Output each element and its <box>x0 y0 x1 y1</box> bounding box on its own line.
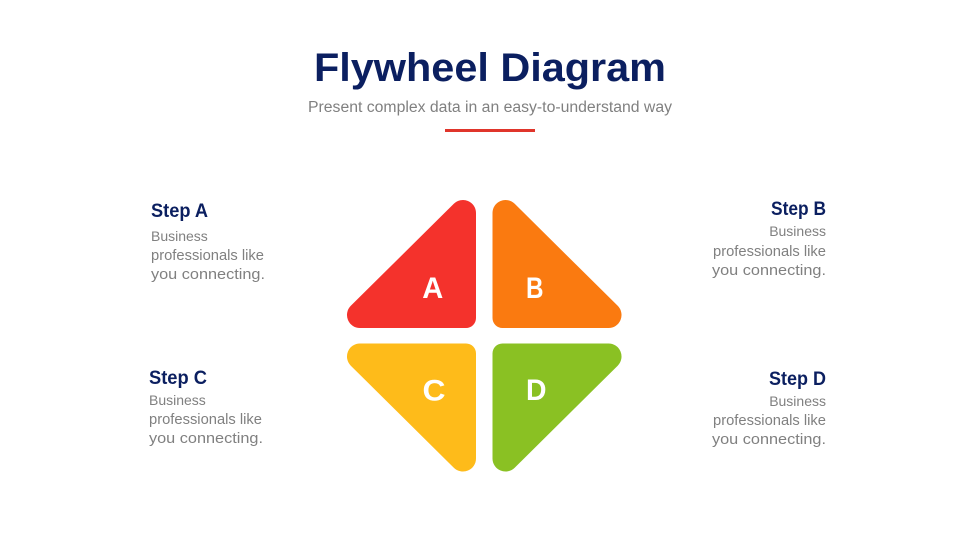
flywheel diagram <box>347 200 622 472</box>
title underline <box>445 129 535 132</box>
text block: Step D: you connecting. <box>712 431 826 448</box>
text block: Step A: you connecting. <box>151 266 265 283</box>
segment D <box>492 344 622 472</box>
subtitle: Present complex data in an easy-to-understand way <box>308 99 672 116</box>
title: Flywheel Diagram <box>314 46 666 90</box>
segment B: B <box>526 272 544 305</box>
text block: Step A: Step A <box>151 201 208 222</box>
text block: Step D: professionals like <box>713 412 826 429</box>
text block: Step B: professionals like <box>713 243 826 260</box>
text block: Step B <box>712 199 826 279</box>
text block: Step D: Business <box>769 393 826 409</box>
text block: Step C: you connecting. <box>149 430 263 447</box>
text block: Step A: professionals like <box>151 247 264 264</box>
text block: Step B: you connecting. <box>712 262 826 279</box>
text block: Step C: professionals like <box>149 411 262 428</box>
segment D: D <box>526 374 546 407</box>
text block: Step C: Step C <box>149 368 207 389</box>
segment A <box>347 200 476 328</box>
segment C <box>347 344 476 472</box>
text block: Step A: Business <box>151 228 208 244</box>
text block: Step D <box>712 369 826 448</box>
text block: Step B: Business <box>769 223 826 239</box>
text block: Step B: Step B <box>771 199 826 220</box>
segment C: C <box>422 374 446 408</box>
segment A: A <box>422 272 443 305</box>
segment B <box>492 200 622 328</box>
text block: Step D: Step D <box>769 369 826 390</box>
text block: Step C <box>149 368 263 447</box>
text block: Step A <box>151 201 265 283</box>
text block: Step C: Business <box>149 392 206 408</box>
